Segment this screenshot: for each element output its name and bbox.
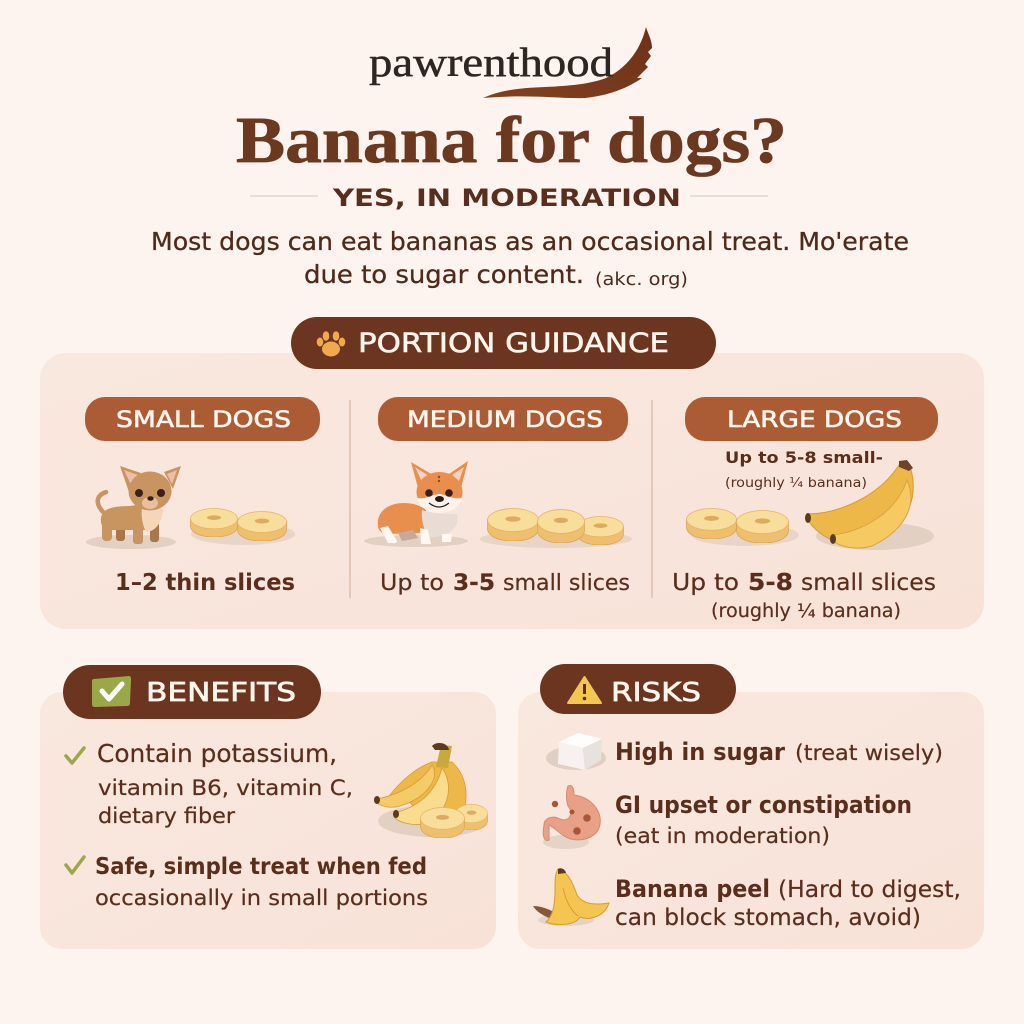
text: overlapping portion note: Up to 5-8 small- [725, 448, 883, 467]
heading: portion guidance: PORTION GUIDANCE [358, 328, 669, 359]
risk: GI upset: (eat in moderation) [615, 824, 830, 849]
text: small dog portion: 1–2 thin slices [115, 570, 295, 596]
intro text: (akc. org) [595, 269, 688, 290]
icon: two banana slices [190, 508, 295, 545]
intro text: due to sugar content. [304, 260, 584, 289]
list item: nutrients: vitamin B6, vitamin C, [98, 776, 353, 801]
label: small dogs: SMALL DOGS [116, 408, 291, 433]
text: large dog portion: (roughly ¼ banana) [711, 601, 901, 622]
icon: warning triangle [568, 677, 601, 703]
list item: safe treat [66, 854, 428, 911]
label: medium dogs: MEDIUM DOGS [407, 408, 603, 433]
label: large dogs: LARGE DOGS [727, 408, 902, 433]
panel: portion guidance [40, 317, 984, 629]
risk: sugar: High in sugar [615, 738, 785, 766]
column: large dogs [672, 397, 938, 622]
icon: stomach [543, 785, 600, 849]
logo: pawrenthood: pawrenthood [369, 39, 613, 85]
heading: benefits: BENEFITS [146, 678, 296, 708]
text: large dog portion [672, 570, 936, 622]
icon: two banana slices [687, 509, 799, 546]
heading: benefits [63, 665, 321, 719]
risk: sugar: (treat wisely) [795, 741, 943, 766]
risk: sugar [546, 733, 943, 770]
column: medium dogs [364, 397, 632, 596]
intro text: Most dogs can eat bananas as an occasional treat. Mo'erate [151, 227, 909, 256]
risk: banana peel: Banana peel [615, 875, 770, 903]
icon: banana bunch with slices [374, 743, 488, 838]
list item: nutrients: dietary fiber [98, 804, 235, 829]
risk: banana peel: can block stomach, avoid) [615, 905, 921, 931]
subtitle with side rules: YES, IN MODERATION [332, 184, 681, 212]
list item: nutrients [66, 739, 353, 829]
panel: risks [518, 664, 984, 949]
text: overlapping portion note: (roughly ¼ banana) [725, 475, 867, 491]
risk: GI upset [543, 785, 912, 849]
risk: banana peel [533, 868, 961, 931]
intro text [151, 227, 909, 290]
label: small dogs [85, 397, 320, 441]
column: small dogs [85, 397, 320, 596]
text: medium dog portion: Up to [380, 571, 444, 596]
risk: GI upset: GI upset or constipation [615, 791, 912, 819]
icon: corgi [364, 461, 468, 547]
text: large dog portion: Up to [672, 570, 739, 596]
text: large dog portion: 5-8 [748, 570, 793, 596]
label: medium dogs [378, 397, 628, 441]
text: medium dog portion: 3-5 [453, 571, 495, 596]
list item: nutrients: Contain potassium, [97, 739, 337, 768]
heading: risks: RISKS [611, 678, 701, 708]
icon: sugar cube [546, 733, 606, 770]
label: large dogs [685, 397, 938, 441]
text: medium dog portion [380, 571, 630, 596]
icon: whole banana [805, 460, 934, 550]
text: medium dog portion: small slices [503, 571, 630, 596]
icon: small dog [86, 466, 181, 549]
title: Banana for dogs? [236, 104, 787, 177]
panel: benefits [40, 665, 496, 949]
risk: banana peel: (Hard to digest, [778, 877, 961, 903]
icon: banana peel [533, 868, 609, 926]
text: overlapping portion note [725, 448, 883, 491]
logo: pawrenthood [369, 27, 652, 98]
icon: paw [317, 331, 345, 356]
heading: risks [540, 664, 736, 714]
text: large dog portion: small slices [801, 570, 936, 596]
icon: check badge [92, 676, 131, 707]
heading: portion guidance [291, 317, 716, 369]
list item: safe treat: Safe, simple treat when fed [95, 854, 427, 880]
list item: safe treat: occasionally in small portions [95, 886, 428, 911]
icon: three banana slices [480, 509, 632, 548]
